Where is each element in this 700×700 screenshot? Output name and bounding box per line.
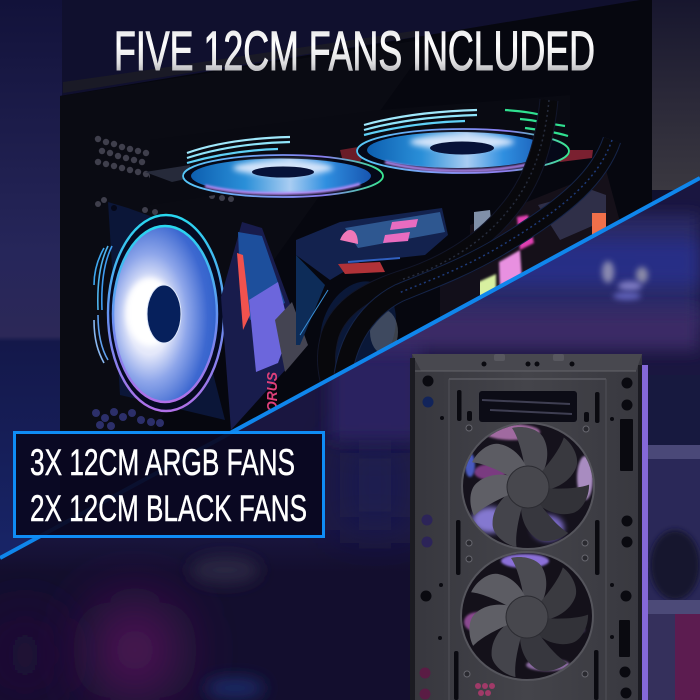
callout: fan counts — [14, 432, 324, 536]
upper 12cm black fan — [462, 423, 594, 549]
top slot — [479, 391, 577, 422]
upper scene: PC interior with ARGB fans — [0, 0, 700, 560]
mounting holes — [420, 362, 633, 700]
radiator and top fan frames — [146, 147, 593, 197]
lower 12cm black fan — [461, 552, 593, 696]
armor shroud with ROG logo — [221, 222, 308, 430]
room background — [0, 0, 700, 560]
top-left ARGB fan — [182, 154, 384, 198]
graphics card shroud — [296, 208, 448, 345]
front ARGB fan — [94, 202, 225, 420]
honeycomb vents — [92, 136, 234, 430]
motherboard and RAM lighting — [440, 170, 620, 322]
pump block — [320, 281, 398, 363]
top-left fan side light rings — [187, 137, 290, 163]
top-right ARGB fan — [356, 128, 570, 174]
callout line: black fans: 2X 12CM BLACK FANS — [30, 488, 307, 529]
purple case edge glow — [642, 365, 648, 700]
diagonal blue divider — [0, 178, 700, 558]
braided liquid cooling tubes — [326, 100, 612, 380]
blurred room background — [0, 170, 700, 700]
armor shroud with ROG logo: ORUS — [264, 372, 281, 412]
top-right fan side light rings — [364, 110, 568, 136]
PC case interior — [60, 0, 652, 431]
PC case fan bracket — [410, 354, 642, 700]
lower honeycomb — [475, 683, 495, 696]
lower scene: blurred room and fan side of case — [0, 170, 700, 700]
callout line: ARGB fans: 3X 12CM ARGB FANS — [30, 442, 295, 483]
